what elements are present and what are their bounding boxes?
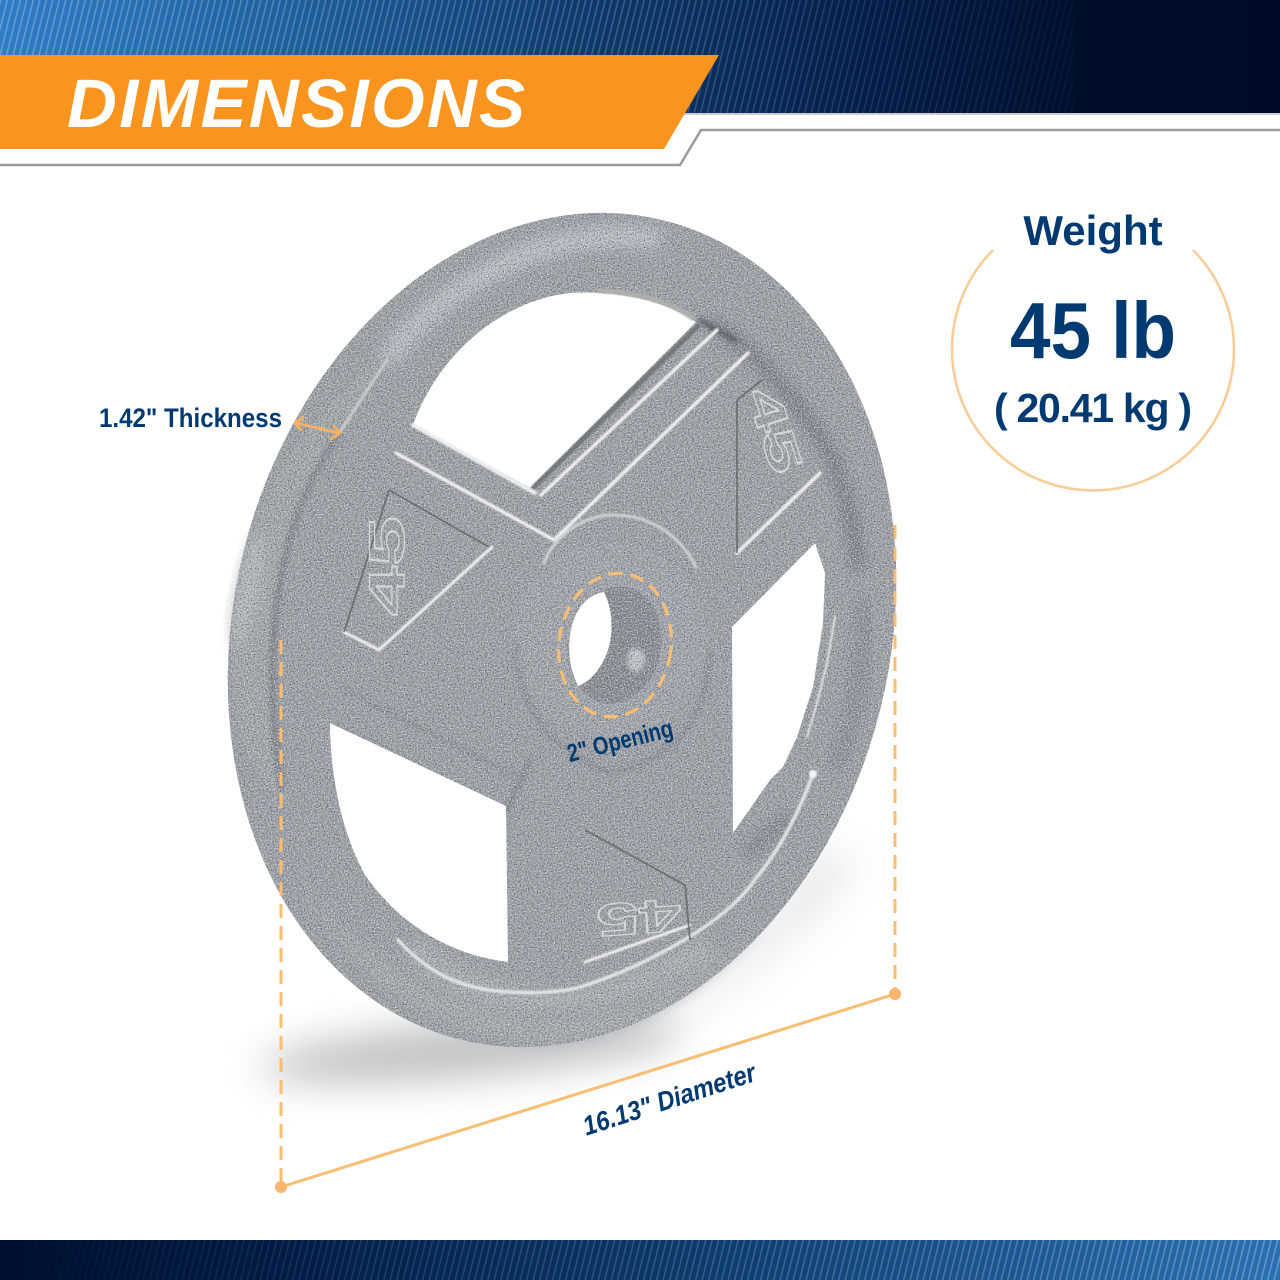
plate shadow bbox=[259, 850, 860, 1094]
title: DIMENSIONS bbox=[67, 65, 525, 142]
header banner bbox=[0, 0, 1280, 165]
left dashed extension bbox=[280, 640, 282, 1187]
weight panel bbox=[952, 207, 1234, 490]
weight value lb: 45 lb bbox=[1010, 286, 1176, 375]
footer banner bbox=[0, 1240, 1280, 1280]
diameter label: 16.13" Diameter bbox=[579, 1057, 761, 1142]
weight heading: Weight bbox=[1023, 207, 1163, 254]
weight ring bbox=[952, 250, 1234, 490]
opening dashed ring bbox=[550, 566, 680, 724]
window: right bbox=[732, 543, 825, 833]
weight plate bbox=[142, 141, 982, 1119]
hole opening bbox=[569, 592, 612, 686]
callout: diameter bbox=[275, 525, 901, 1193]
highlights bbox=[340, 330, 835, 993]
right dashed extension bbox=[894, 525, 896, 994]
plate body bbox=[142, 141, 982, 1119]
window: top bbox=[413, 292, 696, 488]
opening label: 2" Opening bbox=[564, 715, 676, 768]
end dots bbox=[275, 988, 901, 1193]
side band bbox=[232, 340, 400, 800]
weight value kg: ( 20.41 kg ) bbox=[994, 385, 1192, 431]
inset triangle outlines bbox=[344, 380, 762, 940]
right rim shade bbox=[835, 600, 863, 770]
embossed numbers: 45 bbox=[595, 889, 683, 947]
upper right groove bbox=[710, 323, 858, 570]
embossed numbers: 45 bbox=[359, 516, 415, 616]
title ribbon bbox=[0, 55, 719, 149]
diameter line bbox=[281, 994, 895, 1187]
lower ring lighter band bbox=[300, 880, 770, 1044]
hole tunnel bbox=[558, 578, 672, 712]
bottom spoke bbox=[554, 770, 558, 975]
hub bbox=[513, 543, 707, 737]
windows bbox=[330, 292, 825, 962]
thickness arrow bbox=[295, 417, 340, 439]
spokes bbox=[332, 725, 530, 812]
callout: opening bbox=[550, 566, 680, 768]
embossed numbers bbox=[359, 380, 814, 947]
thickness label: 1.42" Thickness bbox=[99, 403, 282, 433]
callout: thickness bbox=[99, 403, 340, 439]
left rim shade bbox=[272, 432, 340, 790]
embossed numbers: 45 bbox=[737, 380, 814, 480]
window: bottom left bbox=[330, 723, 508, 962]
window edge shading bbox=[534, 291, 735, 487]
top ridge highlight bbox=[387, 236, 660, 360]
